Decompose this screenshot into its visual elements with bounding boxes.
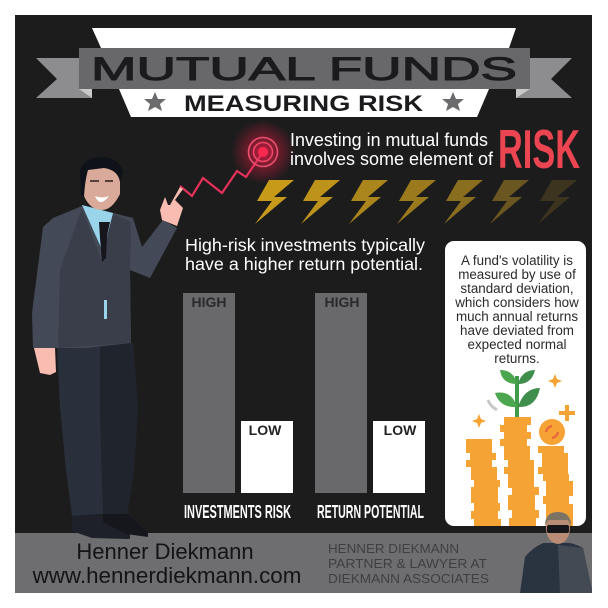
icon: businessman: [32, 157, 183, 539]
footer bar: [15, 533, 592, 593]
shirt: [82, 205, 113, 252]
footer name and website: [32, 539, 301, 588]
trousers: [57, 343, 138, 516]
icon: coin: [539, 419, 565, 445]
card text: expected normal: [468, 337, 567, 352]
bar chart: return potential: LOW: [384, 422, 417, 438]
bar chart: return potential: RETURN POTENTIAL: [317, 501, 424, 522]
icon: rising risk line with target: [180, 120, 295, 196]
lower hand: [34, 348, 56, 375]
footer name and website: Henner Diekmann: [76, 539, 254, 564]
bar chart: investments risk: [183, 293, 293, 522]
title: MUTUAL FUNDS: [91, 51, 517, 87]
shoes: [72, 514, 130, 539]
footer name and website: www.hennerdiekmann.com: [32, 563, 301, 588]
bar chart: investments risk: HIGH: [192, 294, 226, 310]
smile: [95, 196, 109, 202]
icon: lightning bolts: [255, 180, 577, 224]
footer credentials: [328, 541, 489, 586]
ribbon tails: [36, 58, 572, 98]
footer credentials: DIEKMANN ASSOCIATES: [328, 571, 489, 586]
risk statement: Investing in mutual funds: [290, 129, 488, 150]
bar chart: investments risk: INVESTMENTS RISK: [184, 501, 291, 522]
white subtitle ribbon: [119, 89, 489, 117]
card text: [454, 253, 579, 366]
bar chart: return potential: HIGH: [324, 294, 360, 310]
icon: plant: [495, 370, 540, 418]
hair: [80, 157, 123, 197]
portrait photo: [520, 512, 592, 593]
card text: returns.: [494, 351, 540, 366]
footer credentials: HENNER DIEKMANN: [328, 541, 459, 556]
footer credentials: PARTNER & LAWYER AT: [328, 556, 487, 571]
statement: high-risk: High-risk investments typically: [185, 235, 425, 255]
head: [84, 160, 120, 210]
icon: coin stacks: [466, 417, 573, 526]
panel: volatility card: [445, 241, 586, 526]
eyes: [90, 180, 113, 182]
icon: arc mark: [488, 400, 497, 410]
subtitle: MEASURING RISK: [184, 91, 423, 116]
statement: high-risk: [185, 235, 425, 274]
risk statement: involves some element of: [290, 148, 494, 169]
risk statement: [290, 118, 580, 180]
icon: sparkles: [472, 374, 575, 428]
card text: standard deviation,: [460, 281, 574, 296]
card text: measured by use of: [458, 267, 576, 282]
title banner: [36, 28, 572, 117]
white ribbon back: [92, 28, 516, 48]
bar chart: return potential: [315, 293, 425, 522]
card text: have deviated from: [460, 323, 574, 338]
card text: much annual returns: [456, 309, 578, 324]
jacket: [32, 206, 177, 348]
card text: A fund's volatility is: [461, 253, 573, 268]
grey title band: [79, 48, 530, 89]
tie: [99, 222, 110, 262]
bar chart: investments risk: LOW: [249, 422, 282, 438]
icon: stars: [144, 92, 464, 111]
statement: high-risk: have a higher return potential.: [185, 254, 423, 274]
card text: which considers how: [454, 295, 579, 310]
pointing hand: [160, 187, 183, 226]
